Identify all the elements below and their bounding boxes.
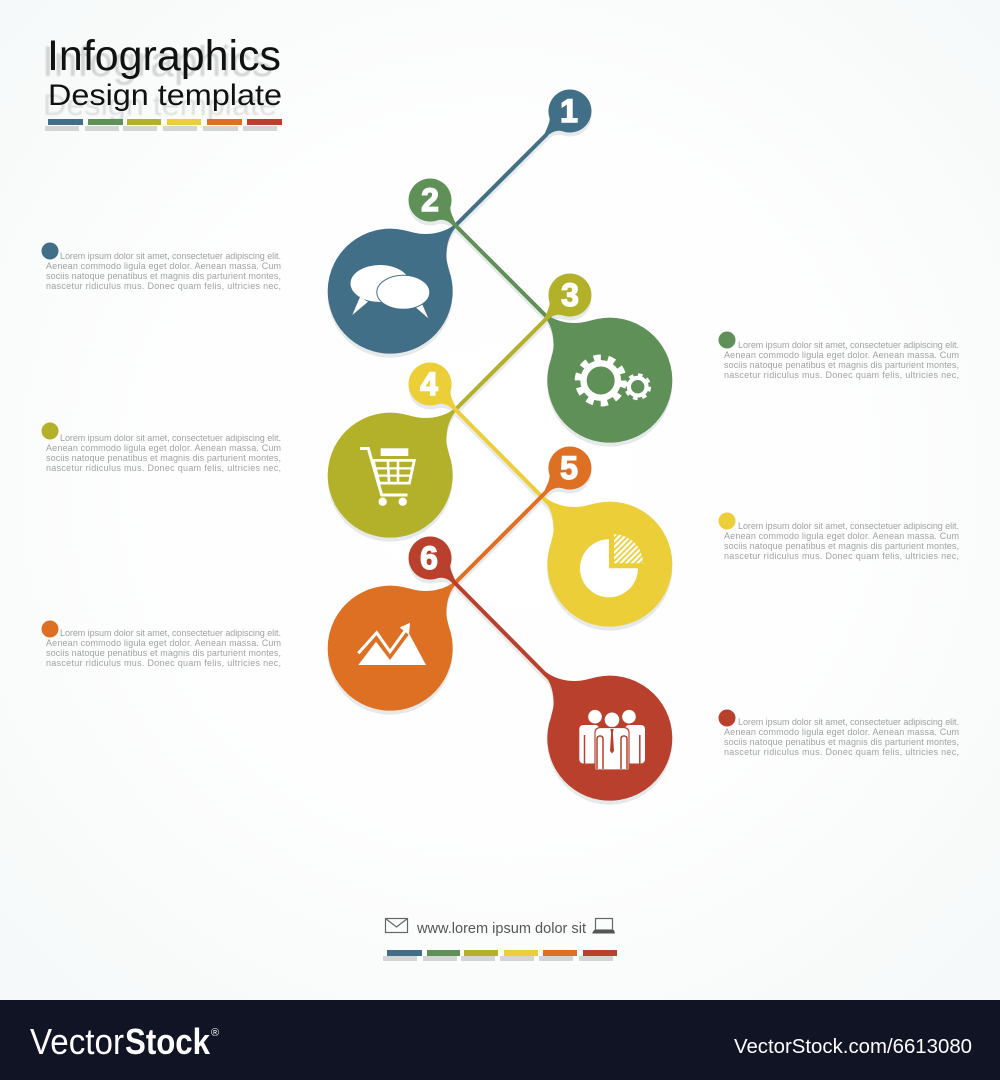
icon: shopping cart: [360, 448, 416, 506]
text block 2: [718, 332, 959, 380]
text block 6: Aenean commodo ligula eget dolor. Aenean massa. Cum: [724, 727, 959, 737]
icon: pie chart: [580, 534, 643, 597]
title: [42, 32, 282, 122]
step 5: orange pin, connector and drop: [328, 447, 591, 711]
watermark footer bar: VectorStock.com/6613080: [734, 1036, 972, 1058]
text block 5: [42, 620, 281, 668]
step 1: blue pin, connector and drop: 1: [560, 93, 578, 129]
text block 4: Aenean commodo ligula eget dolor. Aenean massa. Cum: [724, 531, 959, 541]
colour bar strip: footer: [383, 950, 617, 961]
drop shadows under the diagram: [328, 94, 672, 805]
text block 6: [718, 710, 959, 757]
text block 5: nascetur ridiculus mus. Donec quam felis, ultricies nec,: [46, 658, 281, 668]
text block 2: Lorem ipsum dolor sit amet, consectetuer adipiscing elit.: [738, 340, 959, 350]
title: Infographics: [42, 38, 273, 86]
text block 1: nascetur ridiculus mus. Donec quam felis, ultricies nec,: [46, 281, 281, 291]
text block 5: Lorem ipsum dolor sit amet, consectetuer adipiscing elit.: [60, 628, 281, 638]
title: Design template: [48, 79, 282, 112]
text block 1: sociis natoque penatibus et magnis dis parturient montes,: [46, 271, 281, 281]
contact line: website with mail and laptop icons: www.lorem ipsum dolor sit: [416, 921, 586, 937]
step 4: yellow pin, connector and drop: 4: [420, 366, 438, 402]
text block 6: nascetur ridiculus mus. Donec quam felis, ultricies nec,: [724, 747, 959, 757]
icon: rising chart over mountains: [358, 623, 426, 665]
step 3: olive pin, connector and drop: [328, 274, 591, 538]
watermark footer bar: [0, 1000, 1000, 1080]
step 3: olive pin, connector and drop: 3: [561, 277, 579, 313]
text block 1: Lorem ipsum dolor sit amet, consectetuer adipiscing elit.: [60, 251, 281, 261]
text block 3: Lorem ipsum dolor sit amet, consectetuer adipiscing elit.: [60, 433, 281, 443]
title: Infographics: [47, 32, 281, 80]
step 2: green pin, connector and drop: [409, 179, 672, 443]
text block 3: [42, 422, 281, 473]
text block 5: sociis natoque penatibus et magnis dis parturient montes,: [46, 648, 281, 658]
step 6: red pin, connector and drop: 6: [420, 540, 438, 576]
text block 3: sociis natoque penatibus et magnis dis parturient montes,: [46, 453, 281, 463]
text block 4: sociis natoque penatibus et magnis dis parturient montes,: [724, 541, 959, 551]
text block 6: Lorem ipsum dolor sit amet, consectetuer adipiscing elit.: [738, 717, 959, 727]
text block 1: [42, 242, 281, 291]
step 2: green pin, connector and drop: 2: [421, 182, 439, 218]
colour bar strip: header: [45, 119, 282, 131]
step 5: orange pin, connector and drop: 5: [560, 450, 578, 486]
text block 2: sociis natoque penatibus et magnis dis parturient montes,: [724, 360, 959, 370]
text block 1: Aenean commodo ligula eget dolor. Aenean massa. Cum: [46, 261, 281, 271]
text block 2: nascetur ridiculus mus. Donec quam felis, ultricies nec,: [724, 370, 959, 380]
icon: chat bubbles: [350, 265, 430, 318]
text block 3: nascetur ridiculus mus. Donec quam felis, ultricies nec,: [46, 463, 281, 473]
step 6: red pin, connector and drop: [409, 537, 672, 801]
step 4: yellow pin, connector and drop: [409, 363, 672, 627]
text block 4: [718, 512, 959, 561]
text block 4: nascetur ridiculus mus. Donec quam felis, ultricies nec,: [724, 551, 959, 561]
step 1: blue pin, connector and drop: [328, 90, 591, 354]
icon: envelope: [386, 918, 408, 932]
text block 3: Aenean commodo ligula eget dolor. Aenean massa. Cum: [46, 443, 281, 453]
watermark footer bar: Stock: [125, 1021, 211, 1062]
icon: laptop: [592, 918, 615, 934]
title: Design template: [43, 89, 277, 122]
text block 6: sociis natoque penatibus et magnis dis parturient montes,: [724, 737, 959, 747]
contact line: website with mail and laptop icons: [386, 918, 615, 937]
text block 5: Aenean commodo ligula eget dolor. Aenean massa. Cum: [46, 638, 281, 648]
watermark footer bar: Vector: [30, 1021, 124, 1062]
icon: business team: [579, 710, 645, 770]
text block 2: Aenean commodo ligula eget dolor. Aenean massa. Cum: [724, 350, 959, 360]
watermark footer bar: ®: [211, 1027, 219, 1039]
icon: gears: [578, 358, 650, 404]
text block 4: Lorem ipsum dolor sit amet, consectetuer adipiscing elit.: [738, 521, 959, 531]
